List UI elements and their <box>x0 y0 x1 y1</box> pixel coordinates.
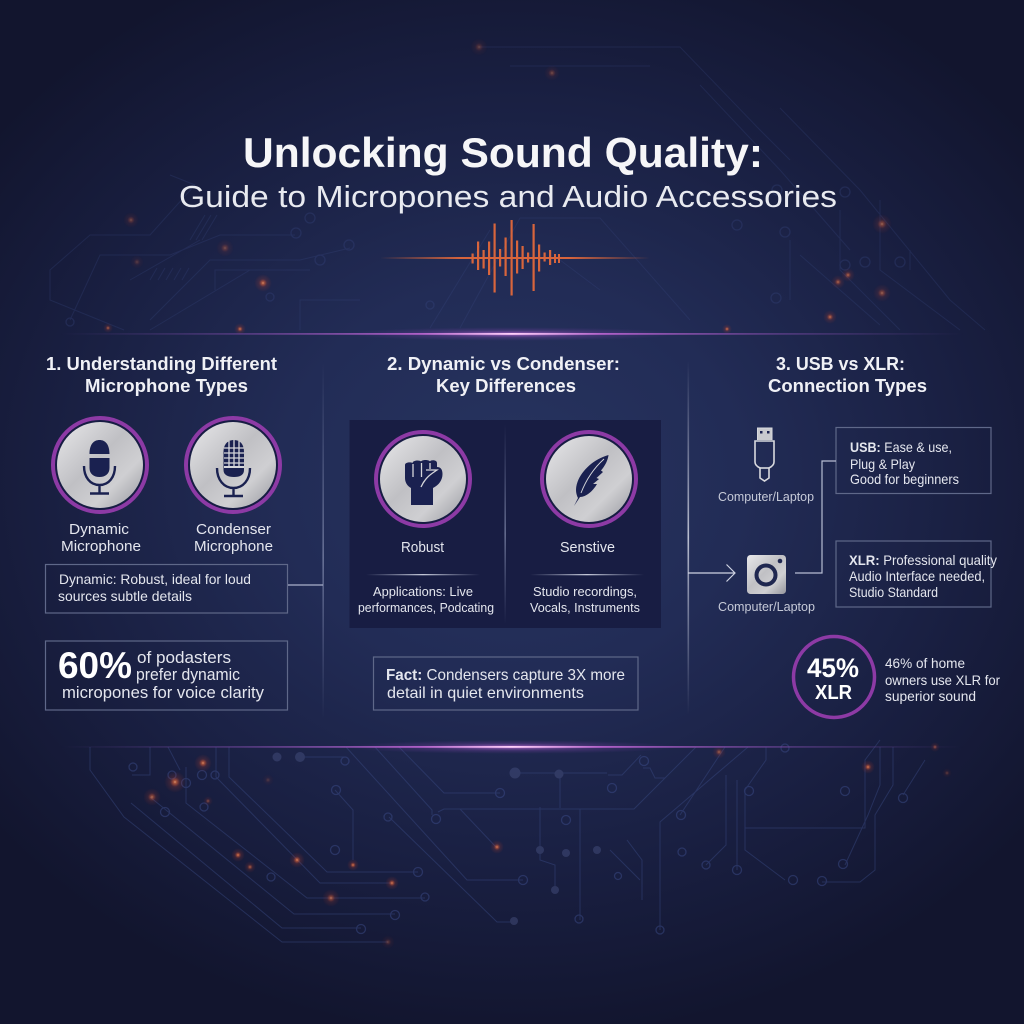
icon: audio interface <box>747 555 786 594</box>
stat: 45% xlr: XLR <box>815 682 853 704</box>
icon: feather <box>542 432 636 526</box>
icon: orange sound wave <box>380 220 650 296</box>
callout: usb: Plug & Play <box>850 456 915 472</box>
divider: bottom glow line <box>60 740 964 754</box>
circuit pattern: bottom <box>90 740 925 942</box>
stat: 60% of podcasters: of podasters <box>137 648 231 667</box>
text: condenser applications <box>530 584 640 615</box>
heading: section 2: Key Differences <box>436 375 576 396</box>
label: usb device: Computer/Laptop <box>718 490 814 504</box>
connector: interface to usb callout <box>795 461 836 573</box>
icon: condenser microphone <box>186 418 280 512</box>
label: sensitive: Senstive <box>560 539 615 556</box>
text: dynamic applications: performances, Podcating <box>358 600 494 615</box>
label: dynamic microphone: Microphone <box>61 538 141 555</box>
callout: xlr: Audio Interface needed, <box>849 568 985 584</box>
callout: xlr: Studio Standard <box>849 584 938 600</box>
text: xlr share: 46% of home <box>885 655 965 671</box>
callout: condenser fact <box>374 657 638 710</box>
title block <box>179 129 837 214</box>
callout: condenser fact: Fact: Condensers capture 3X more <box>386 667 625 684</box>
stat: 45% xlr <box>794 636 874 718</box>
callout: usb: Good for beginners <box>850 471 959 487</box>
heading: section 2: 2. Dynamic vs Condenser: <box>387 353 620 374</box>
heading: section 3: 3. USB vs XLR: <box>776 353 905 374</box>
heading: section 1: 1. Understanding Different <box>46 353 277 374</box>
connector: callout to divider <box>288 584 323 586</box>
comparison table <box>350 420 661 628</box>
divider: column line left <box>322 360 324 720</box>
glowing sparks <box>103 38 952 949</box>
icon: fist <box>376 432 470 526</box>
circuit pattern: top <box>50 47 985 330</box>
stat: 45% xlr: 45% <box>807 653 859 683</box>
stat: 60% of podcasters: micropones for voice clarity <box>62 683 264 702</box>
text: dynamic applications: Applications: Live <box>373 584 473 599</box>
text: xlr share <box>885 655 1000 704</box>
subtitle: Guide to Micropones and Audio Accessories <box>179 179 837 214</box>
panel: microphone types <box>46 353 323 710</box>
stat: 60% of podcasters: prefer dynamic <box>136 665 240 684</box>
label: dynamic microphone <box>61 521 141 555</box>
icon: usb plug <box>755 428 774 481</box>
title: Unlocking Sound Quality: <box>243 129 763 176</box>
label: dynamic microphone: Dynamic <box>69 521 129 538</box>
heading: section 3: Connection Types <box>768 375 927 396</box>
panel: dynamic vs condenser <box>350 353 661 710</box>
callout: xlr: XLR: Professional quality <box>849 552 997 568</box>
callout: condenser fact: detail in quiet environments <box>387 685 584 702</box>
heading: section 3 <box>768 353 927 396</box>
text: xlr share: owners use XLR for <box>885 672 1000 688</box>
label: condenser microphone: Condenser <box>196 521 271 538</box>
divider: top glow line <box>60 327 964 341</box>
label: robust: Robust <box>401 539 445 556</box>
callout: dynamic description: sources subtle details <box>58 588 192 604</box>
label: condenser microphone: Microphone <box>194 538 273 555</box>
callout: xlr <box>836 541 997 607</box>
heading: section 1: Microphone Types <box>85 375 248 396</box>
label: condenser microphone <box>194 521 273 555</box>
callout: dynamic description: Dynamic: Robust, ideal for loud <box>59 571 251 587</box>
text: condenser applications: Vocals, Instruments <box>530 600 640 615</box>
callout: usb: USB: Ease & use, <box>850 439 952 455</box>
stat: 60% of podcasters: 60% <box>58 645 132 686</box>
icon: dynamic microphone <box>53 418 147 512</box>
callout: dynamic description <box>46 564 288 613</box>
divider: column line right <box>688 360 689 715</box>
text: dynamic applications <box>358 584 494 615</box>
divider: robust rule <box>366 574 480 575</box>
divider: sensitive rule <box>530 574 644 575</box>
callout: usb <box>836 428 991 494</box>
text: condenser applications: Studio recordings, <box>533 584 637 599</box>
heading: section 1 <box>46 353 277 396</box>
heading: section 2 <box>387 353 620 396</box>
panel: usb vs xlr <box>688 353 1000 718</box>
arrow: divider to interface <box>688 564 735 582</box>
label: xlr device: Computer/Laptop <box>718 600 815 614</box>
text: xlr share: superior sound <box>885 688 976 704</box>
stat: 60% of podcasters <box>46 641 288 710</box>
